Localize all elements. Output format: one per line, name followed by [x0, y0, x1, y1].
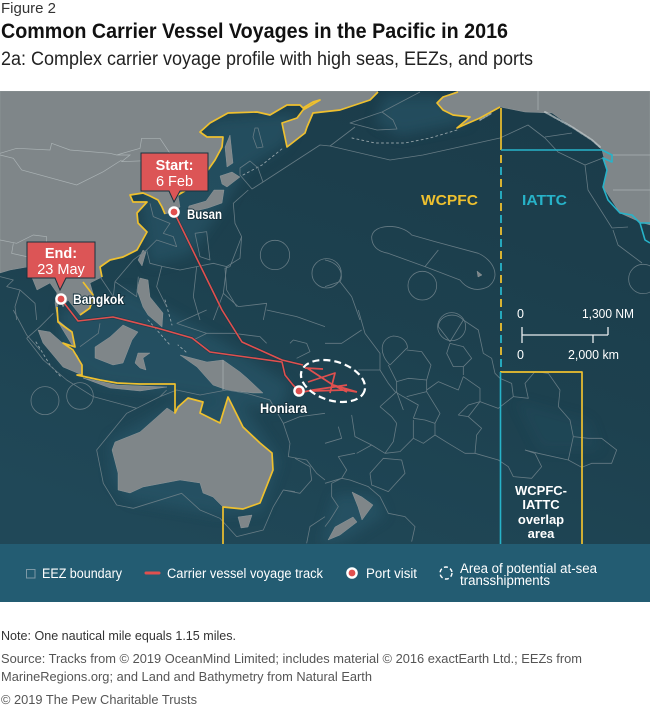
note: Note: One nautical mile equals 1.15 miles. [1, 628, 236, 643]
land borders [0, 138, 170, 257]
vessel voyage track [61, 212, 357, 393]
area of potential transshipments [300, 358, 366, 404]
land: Borneo [95, 325, 138, 365]
callout: start [141, 153, 208, 202]
legend: transshipment area: transshipments [460, 573, 550, 588]
figure label: Figure 2 [1, 0, 56, 17]
port: Busan: Busan [187, 207, 222, 222]
scale bar: 0 [517, 307, 524, 321]
overlap area label: IATTC [522, 497, 560, 512]
source: MarineRegions.org; and Land and Bathymetry from Natural Earth [1, 669, 372, 684]
land: Tasmania [238, 515, 252, 528]
legend: EEZ boundary: EEZ boundary [42, 566, 122, 581]
callout: start: 6 Feb [156, 174, 193, 190]
land: Asia [0, 91, 378, 347]
land: New Zealand [352, 492, 373, 520]
source: Source: Tracks from © 2019 OceanMind Limited; includes material © 2016 exactEarth Ltd.; EEZs from [1, 651, 582, 666]
scale bar: 1,300 NM [582, 307, 634, 321]
overlap area label: overlap [518, 512, 564, 527]
land: Philippines [137, 278, 163, 327]
region label: IATTC: IATTC [522, 192, 567, 209]
legend: voyage track: Carrier vessel voyage track [167, 566, 323, 581]
callout: end [27, 242, 95, 290]
land: New Guinea [180, 355, 263, 393]
scale bar [517, 307, 634, 362]
legend: port visit: Port visit [366, 566, 417, 581]
port: Bangkok [55, 292, 124, 307]
port: Honiara [260, 385, 307, 416]
subtitle: 2a: Complex carrier voyage profile with high seas, EEZs, and ports [1, 49, 533, 70]
scale bar: 0 [517, 348, 524, 362]
callout: end: 23 May [37, 262, 86, 278]
legend [0, 544, 650, 602]
title: Common Carrier Vessel Voyages in the Pacific in 2016 [1, 19, 508, 43]
callout: end: End: [45, 246, 77, 262]
land: Taiwan [138, 250, 146, 266]
land: Hawaii [477, 271, 482, 277]
legend: transshipment area: Area of potential at-sea [460, 561, 597, 576]
land: Sumatra [38, 330, 82, 375]
land: Java and Lesser Sunda [83, 378, 167, 391]
WCPFC boundary: coast lines [57, 92, 650, 545]
region label: WCPFC: WCPFC [421, 192, 478, 209]
source [1, 651, 582, 684]
callout: start: Start: [156, 158, 193, 174]
port: Bangkok: Bangkok [73, 292, 124, 307]
EEZ boundaries [0, 92, 650, 543]
land: Australia [112, 397, 273, 509]
overlap area label: WCPFC- [515, 483, 567, 498]
island chains [36, 130, 457, 378]
land masses [0, 91, 650, 540]
map panel [0, 91, 650, 545]
legend: transshipment area [440, 561, 597, 588]
land: Alaska and North America [437, 91, 650, 225]
port: Honiara: Honiara [260, 401, 307, 416]
land: Sulawesi [135, 353, 150, 370]
overlap area label [515, 486, 566, 538]
IATTC boundary [501, 150, 650, 243]
port: Busan [168, 206, 222, 220]
dashed boundary [500, 155, 502, 372]
land: Sakhalin and Japan [225, 135, 233, 167]
scale bar: 2,000 km [568, 348, 619, 362]
overlap area label: area [528, 526, 555, 541]
